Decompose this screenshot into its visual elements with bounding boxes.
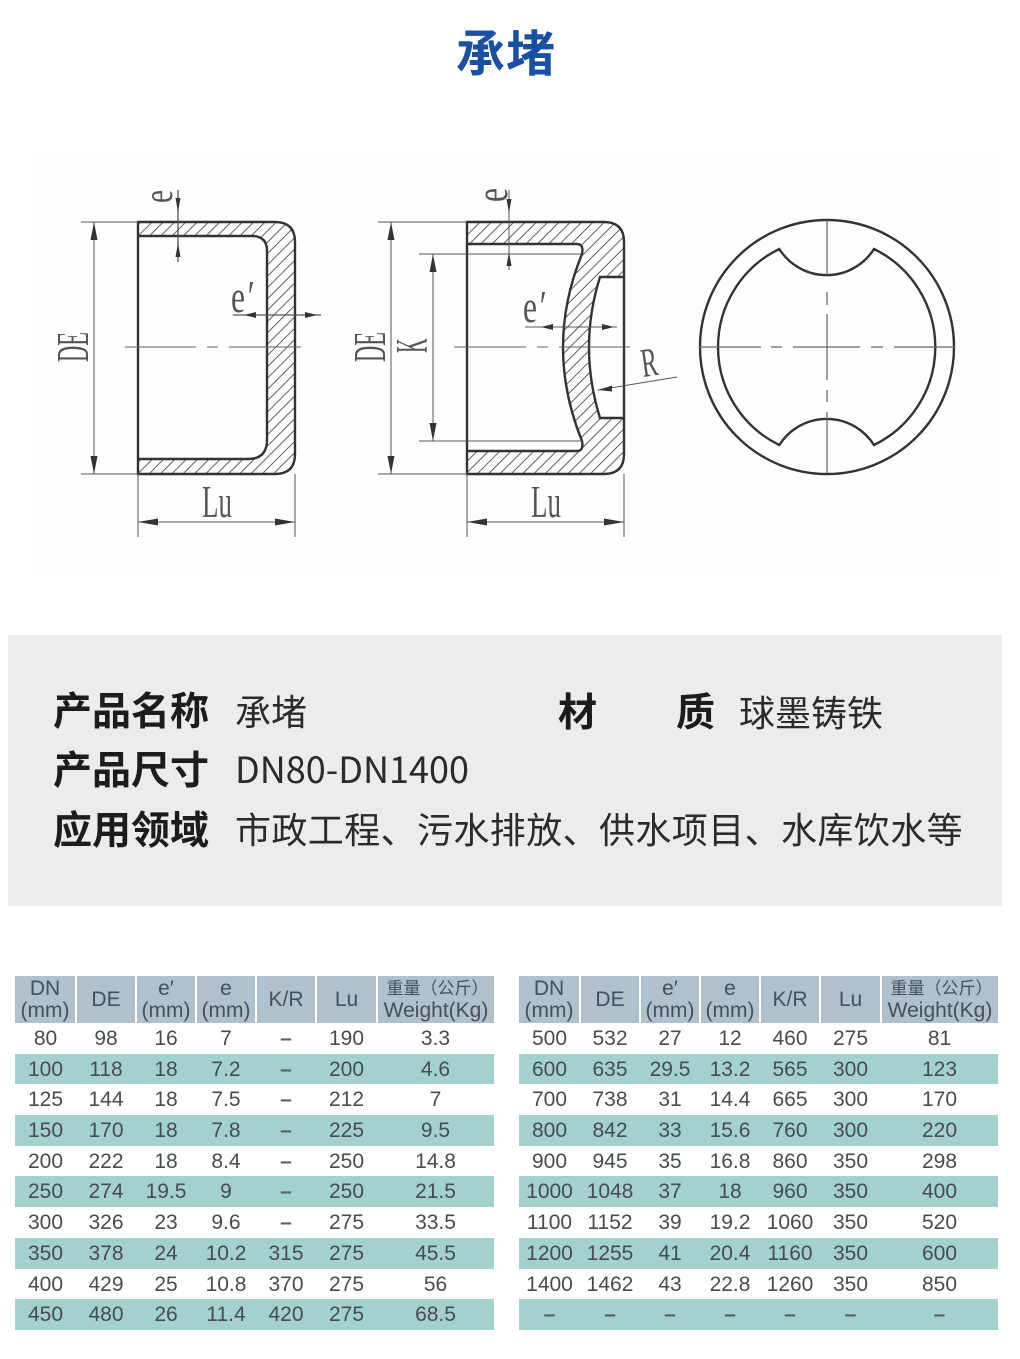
table rows: 300 — [833, 1088, 868, 1111]
table rows: 250 — [28, 1180, 63, 1203]
dimension label: e prime: e′ — [231, 273, 255, 322]
table rows: 1100 — [527, 1211, 572, 1234]
table rows: 9.6 — [211, 1211, 241, 1234]
value: application: 市政工程、污水排放、供水项目、水库饮水等 — [235, 802, 963, 854]
table rows: 1255 — [587, 1242, 633, 1265]
panel: product info — [8, 635, 1002, 906]
table header: e′ — [662, 976, 678, 1000]
table rows: 250 — [329, 1180, 364, 1203]
table rows: 1260 — [767, 1272, 813, 1296]
table rows: 68.5 — [415, 1303, 456, 1326]
table rows: 220 — [922, 1119, 957, 1142]
table rows: 144 — [88, 1088, 124, 1111]
inner outline with notches — [718, 249, 935, 445]
table rows: 18 — [718, 1180, 742, 1203]
table rows: 350 — [833, 1242, 868, 1265]
table rows: 35 — [658, 1150, 682, 1173]
table rows: 18 — [154, 1119, 178, 1142]
table rows: 450 — [28, 1303, 63, 1326]
table rows: 81 — [928, 1027, 951, 1050]
table rows: 19.5 — [146, 1180, 186, 1203]
table rows: 125 — [28, 1088, 63, 1111]
dimension label: DE: DE — [345, 332, 395, 362]
table rows: 11.4 — [206, 1303, 246, 1326]
table rows: 600 — [922, 1242, 957, 1265]
table rows: 800 — [532, 1119, 567, 1142]
table rows: 4.6 — [421, 1058, 450, 1081]
table rows: 250 — [329, 1150, 364, 1173]
table rows: 25 — [154, 1272, 178, 1296]
table header: e — [724, 976, 736, 1000]
table rows: 41 — [658, 1242, 682, 1265]
table rows: 200 — [28, 1150, 63, 1173]
table rows: 275 — [329, 1211, 364, 1234]
hatched wall — [138, 222, 295, 474]
dimension label: e: e — [135, 190, 181, 203]
table header: DN — [534, 976, 564, 1000]
table rows: – — [280, 1027, 292, 1050]
table rows: 20.4 — [710, 1242, 750, 1265]
table header — [15, 976, 494, 1023]
table rows: 274 — [88, 1180, 124, 1203]
table rows: 22.8 — [710, 1272, 750, 1296]
table rows: 23 — [154, 1211, 178, 1234]
table header — [519, 976, 998, 1023]
dimension lines — [81, 190, 321, 537]
table rows: 350 — [833, 1211, 868, 1234]
table: right specification — [519, 976, 998, 1330]
table rows: 298 — [922, 1150, 957, 1173]
table rows: 945 — [592, 1150, 628, 1173]
table rows: 760 — [772, 1119, 808, 1142]
table rows: 520 — [922, 1211, 957, 1234]
table rows: 190 — [329, 1027, 364, 1050]
table rows: 275 — [329, 1272, 364, 1296]
label: product name: 产品名称 — [53, 681, 209, 737]
table rows: 1152 — [587, 1211, 633, 1234]
table rows: 43 — [658, 1272, 682, 1296]
table rows: 1060 — [767, 1211, 813, 1234]
table rows: 7 — [430, 1088, 441, 1111]
dimension label: e: e — [468, 188, 517, 202]
technical drawings — [48, 188, 956, 537]
table rows: 123 — [922, 1058, 957, 1081]
table rows: 565 — [772, 1058, 808, 1081]
table rows: 7.5 — [211, 1088, 241, 1111]
table rows: 275 — [329, 1242, 364, 1265]
table header: (mm) — [20, 998, 69, 1022]
label: application: 应用领域 — [53, 800, 209, 856]
table rows: 315 — [268, 1242, 304, 1265]
table header: Weight(Kg) — [888, 998, 992, 1022]
table rows: 738 — [592, 1088, 628, 1111]
arrowheads — [388, 199, 624, 526]
table rows: – — [280, 1211, 292, 1234]
dimension label: e prime: e′ — [523, 283, 547, 332]
table rows: 1400 — [526, 1272, 573, 1296]
table rows: 1048 — [587, 1180, 633, 1203]
table rows — [15, 1027, 494, 1330]
label: material 2: 质 — [676, 682, 715, 738]
table rows: 24 — [154, 1242, 178, 1265]
table rows: 400 — [922, 1180, 957, 1203]
table rows: 665 — [772, 1088, 808, 1111]
table rows: 300 — [833, 1119, 868, 1142]
table rows: 350 — [833, 1180, 868, 1203]
table rows: 429 — [88, 1272, 124, 1296]
table rows: 400 — [28, 1272, 63, 1296]
drawing: plain cap section — [48, 190, 321, 537]
dimension label: Lu: Lu — [202, 478, 232, 528]
table header: (mm) — [646, 998, 694, 1022]
table rows: 9 — [220, 1180, 232, 1203]
table rows: 13.2 — [710, 1058, 750, 1081]
table rows: 8.4 — [211, 1150, 241, 1173]
table rows: 860 — [772, 1150, 808, 1173]
dimension label: Lu: Lu — [531, 478, 561, 528]
table rows: 370 — [268, 1272, 304, 1296]
table rows: 10.2 — [206, 1242, 246, 1265]
table rows: – — [280, 1119, 292, 1142]
table rows: 14.4 — [710, 1088, 750, 1111]
table rows: – — [544, 1303, 555, 1326]
table rows: 600 — [532, 1058, 567, 1081]
dimension label: K: K — [387, 338, 437, 353]
table rows: 850 — [922, 1272, 957, 1296]
table rows: 1462 — [587, 1272, 633, 1296]
value: product size: DN80-DN1400 — [235, 742, 469, 794]
table rows: – — [604, 1303, 616, 1326]
outer ring — [700, 220, 954, 474]
table rows: 420 — [268, 1303, 304, 1326]
table header: DE — [595, 988, 625, 1010]
table rows: 275 — [329, 1303, 364, 1326]
dimension lines — [378, 190, 677, 537]
dimension label: R: R — [638, 340, 661, 387]
table header: e′ — [158, 976, 174, 1000]
table rows: 29.5 — [650, 1058, 690, 1081]
table rows: – — [724, 1303, 736, 1326]
table rows: 9.5 — [421, 1119, 450, 1142]
table rows — [519, 1027, 998, 1330]
table: left specification — [15, 976, 494, 1330]
table rows: 14.8 — [415, 1150, 456, 1173]
table rows: 1200 — [526, 1242, 573, 1265]
dimension label: DE: DE — [48, 332, 98, 362]
table rows: 300 — [28, 1211, 63, 1234]
table rows: 56 — [424, 1272, 447, 1296]
table header: Lu — [839, 988, 862, 1010]
table header: (mm) — [142, 998, 190, 1022]
table header: DE — [91, 988, 121, 1010]
table rows: 1000 — [526, 1180, 573, 1203]
table rows: 460 — [772, 1027, 808, 1050]
table rows: 700 — [532, 1088, 567, 1111]
table rows: 18 — [154, 1088, 178, 1111]
table rows: 118 — [89, 1058, 123, 1081]
table rows: 39 — [658, 1211, 682, 1234]
table rows: 170 — [88, 1119, 124, 1142]
table header: 重量（公斤） — [890, 978, 992, 998]
table rows: 326 — [88, 1211, 124, 1234]
table rows: 16.8 — [710, 1150, 750, 1173]
table rows: 225 — [329, 1119, 364, 1142]
table rows: 27 — [658, 1027, 682, 1050]
table rows: – — [845, 1303, 856, 1326]
table header: (mm) — [706, 998, 754, 1022]
value: product name: 承堵 — [235, 684, 307, 736]
table rows: – — [280, 1180, 292, 1203]
table header: 重量（公斤） — [386, 978, 488, 998]
table rows: 18 — [154, 1150, 178, 1173]
table rows: 45.5 — [415, 1242, 456, 1265]
table rows: 100 — [28, 1058, 63, 1081]
table rows: 80 — [34, 1027, 57, 1050]
table rows: 7.8 — [211, 1119, 241, 1142]
table rows: 98 — [94, 1027, 118, 1050]
drawing: cap with recess section — [345, 188, 677, 537]
table rows: 1160 — [767, 1242, 813, 1265]
table rows: 480 — [88, 1303, 124, 1326]
table rows: 222 — [88, 1150, 124, 1173]
table rows: 635 — [592, 1058, 628, 1081]
table rows: 18 — [154, 1058, 178, 1081]
table header: (mm) — [202, 998, 250, 1022]
table rows: 19.2 — [710, 1211, 750, 1234]
table header: K/R — [268, 988, 304, 1010]
table header: K/R — [772, 988, 808, 1010]
table rows: – — [280, 1150, 292, 1173]
table header: Lu — [335, 988, 358, 1010]
table header: Weight(Kg) — [384, 998, 488, 1022]
table rows: 15.6 — [710, 1119, 750, 1142]
table rows: – — [280, 1088, 292, 1111]
table rows: 300 — [833, 1058, 868, 1081]
table rows: 900 — [532, 1150, 567, 1173]
value: material: 球墨铸铁 — [739, 685, 883, 737]
table rows: 350 — [28, 1242, 63, 1265]
title: 承堵 — [456, 15, 556, 86]
table rows: – — [934, 1303, 945, 1326]
table rows: 7 — [220, 1027, 232, 1050]
centre lines — [699, 220, 955, 473]
label: product size: 产品尺寸 — [53, 740, 209, 796]
table rows: 532 — [592, 1027, 628, 1050]
table rows: 150 — [28, 1119, 63, 1142]
table rows: 31 — [658, 1088, 682, 1111]
table rows: – — [664, 1303, 676, 1326]
table rows: 350 — [833, 1272, 868, 1296]
table rows: 200 — [329, 1058, 364, 1081]
table rows: 378 — [88, 1242, 124, 1265]
table rows: 3.3 — [421, 1027, 450, 1050]
table rows: 33 — [658, 1119, 682, 1142]
table rows: – — [784, 1303, 796, 1326]
table rows: 275 — [833, 1027, 868, 1050]
table rows: 212 — [329, 1088, 364, 1111]
arrowheads — [90, 198, 317, 526]
table rows: 37 — [658, 1180, 682, 1203]
table rows: 500 — [532, 1027, 567, 1050]
table rows: 7.2 — [211, 1058, 241, 1081]
table rows: 21.5 — [415, 1180, 456, 1203]
table rows: 26 — [154, 1303, 178, 1326]
table rows: 12 — [718, 1027, 742, 1050]
table rows: 960 — [772, 1180, 808, 1203]
table rows: – — [280, 1058, 292, 1081]
table rows: 170 — [922, 1088, 957, 1111]
table rows: 10.8 — [206, 1272, 246, 1296]
table header: DN — [30, 976, 60, 1000]
table rows: 842 — [592, 1119, 628, 1142]
table rows: 33.5 — [415, 1211, 456, 1234]
table rows: 350 — [833, 1150, 868, 1173]
hatched wall — [467, 222, 624, 474]
table rows: 16 — [154, 1027, 178, 1050]
table header: (mm) — [524, 998, 573, 1022]
drawing: end view circle — [699, 220, 955, 474]
table header: e — [220, 976, 232, 1000]
label: material 1: 材 — [558, 682, 597, 738]
